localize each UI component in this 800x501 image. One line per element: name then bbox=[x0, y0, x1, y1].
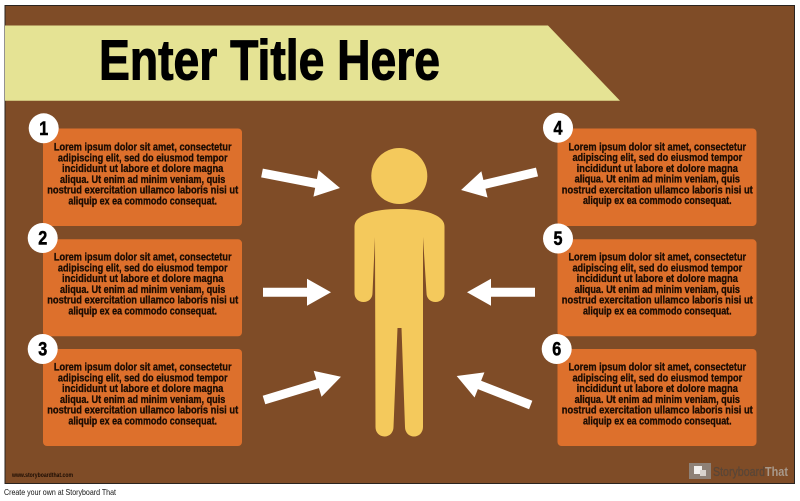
panel: text box 5: aliquip ex ea commodo consequat. bbox=[583, 305, 732, 317]
number badge 1 bbox=[29, 113, 59, 143]
panel: text box 5 bbox=[558, 239, 756, 336]
panel: text box 4: aliqua. Ut enim ad minim veniam, quis bbox=[575, 174, 740, 186]
number badge 5: 5 bbox=[554, 229, 563, 250]
arrow 1 bbox=[259, 160, 343, 201]
number badge 6: 6 bbox=[552, 340, 561, 361]
panel: text box 1: nostrud exercitation ullamco laboris nisi ut bbox=[47, 185, 239, 197]
panel: text box 3 bbox=[43, 349, 242, 446]
number badge 6 bbox=[542, 334, 572, 364]
panel: text box 4: adipiscing elit, sed do eiusmod tempor bbox=[572, 152, 743, 164]
panel: text box 1: adipiscing elit, sed do eiusmod tempor bbox=[58, 152, 228, 164]
panel: text box 5: adipiscing elit, sed do eiusmod tempor bbox=[572, 262, 743, 274]
panel: text box 6 bbox=[558, 349, 756, 446]
panel: text box 6: aliquip ex ea commodo consequat. bbox=[583, 415, 732, 427]
panel: text box 2 bbox=[43, 239, 242, 336]
panel: text box 4 bbox=[558, 128, 756, 226]
panel: text box 3: adipiscing elit, sed do eiusmod tempor bbox=[58, 372, 228, 384]
number badge 4 bbox=[543, 113, 573, 143]
panel: text box 4: nostrud exercitation ullamco laboris nisi ut bbox=[562, 184, 753, 196]
panel: text box 4: incididunt ut labore et dolore magna bbox=[577, 163, 739, 175]
panel: text box 6: adipiscing elit, sed do eiusmod tempor bbox=[572, 372, 743, 384]
panel: text box 1: Lorem ipsum dolor sit amet, consectetur bbox=[54, 142, 232, 154]
logo: Storyboard That bbox=[689, 463, 789, 479]
panel: text box 5: nostrud exercitation ullamco laboris nisi ut bbox=[562, 295, 753, 307]
panel: text box 2: nostrud exercitation ullamco laboris nisi ut bbox=[47, 295, 239, 307]
number badge 2 bbox=[28, 223, 58, 253]
panel: text box 6: incididunt ut labore et dolore magna bbox=[577, 383, 739, 395]
panel: text box 3: Lorem ipsum dolor sit amet, consectetur bbox=[54, 362, 232, 374]
panel: text box 6: Lorem ipsum dolor sit amet, consectetur bbox=[568, 362, 747, 374]
panel: text box 2: aliqua. Ut enim ad minim veniam, quis bbox=[60, 284, 225, 296]
watermark url: www.storyboardthat.com bbox=[11, 473, 73, 479]
arrow 3 bbox=[260, 364, 345, 413]
title banner bbox=[5, 26, 620, 101]
panel: text box 1: incididunt ut labore et dolore magna bbox=[62, 163, 224, 175]
panel: text box 5: Lorem ipsum dolor sit amet, consectetur bbox=[568, 252, 747, 264]
logo: Storyboard That: Storyboard bbox=[713, 464, 765, 479]
number badge 4: 4 bbox=[554, 118, 563, 139]
title: Enter Title Here bbox=[99, 28, 440, 92]
panel: text box 3: nostrud exercitation ullamco laboris nisi ut bbox=[47, 405, 239, 417]
arrow 6 bbox=[452, 363, 536, 418]
panel: text box 6: nostrud exercitation ullamco laboris nisi ut bbox=[562, 405, 753, 417]
logo: Storyboard That: That bbox=[765, 464, 789, 479]
panel: text box 5: aliqua. Ut enim ad minim veniam, quis bbox=[575, 284, 740, 296]
panel: text box 2: incididunt ut labore et dolore magna bbox=[62, 273, 224, 285]
panel: text box 1: aliqua. Ut enim ad minim veniam, quis bbox=[60, 174, 225, 186]
arrow 2 bbox=[263, 279, 331, 306]
arrow 4 bbox=[458, 159, 540, 203]
panel: text box 2: adipiscing elit, sed do eiusmod tempor bbox=[58, 262, 228, 274]
panel: text box 4: Lorem ipsum dolor sit amet, consectetur bbox=[568, 141, 747, 153]
number badge 3: 3 bbox=[38, 340, 47, 361]
panel: text box 3: incididunt ut labore et dolore magna bbox=[62, 383, 224, 395]
panel: text box 4: aliquip ex ea commodo consequat. bbox=[583, 195, 732, 207]
number badge 2: 2 bbox=[38, 229, 47, 250]
panel: text box 2: Lorem ipsum dolor sit amet, consectetur bbox=[54, 252, 232, 264]
number badge 1: 1 bbox=[39, 119, 49, 140]
icon: person figure bbox=[354, 148, 444, 436]
panel: text box 1: aliquip ex ea commodo consequat. bbox=[68, 195, 217, 207]
arrow 5 bbox=[467, 279, 535, 306]
panel: text box 3: aliqua. Ut enim ad minim veniam, quis bbox=[60, 394, 225, 406]
panel: text box 6: aliqua. Ut enim ad minim veniam, quis bbox=[575, 394, 740, 406]
panel: text box 5: incididunt ut labore et dolore magna bbox=[577, 273, 739, 285]
number badge 3 bbox=[28, 334, 58, 364]
panel: text box 3: aliquip ex ea commodo consequat. bbox=[68, 415, 217, 427]
panel: text box 2: aliquip ex ea commodo consequat. bbox=[68, 305, 217, 317]
number badge 5 bbox=[543, 224, 573, 254]
panel: text box 1 bbox=[43, 128, 242, 226]
footer text: Create your own at Storyboard That bbox=[4, 487, 117, 497]
